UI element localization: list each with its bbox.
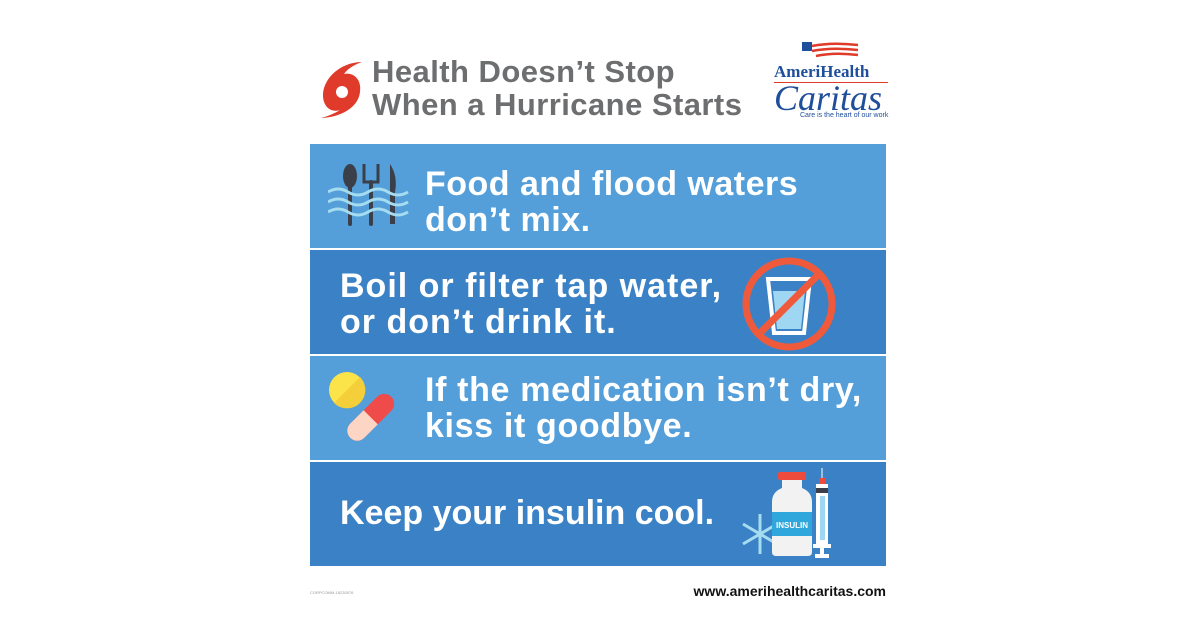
text: don’t mix. [425,201,591,239]
text: Keep your insulin cool. [340,494,714,532]
panel: medication [310,356,886,460]
panel: insulin [310,462,886,566]
text [425,371,862,445]
footer url: www.amerihealthcaritas.com [694,583,886,599]
logo: AmeriHealth Caritas: AmeriHealth [774,62,869,81]
panel: food and flood waters [310,144,886,248]
text: Food and flood waters [425,165,798,203]
text [425,165,798,239]
icon: pills [329,372,394,441]
icon: insulin vial, syringe, snowflake: INSULIN [776,521,808,530]
footer code: CORPCOMM-18230576 [310,590,353,595]
text: Boil or filter tap water, [340,267,722,305]
text: kiss it goodbye. [425,407,692,445]
icon: utensils and waves [328,164,409,226]
logo: AmeriHealth Caritas: Care is the heart of our work [800,112,888,119]
icon: hurricane [320,62,362,118]
text: If the medication isn’t dry, [425,371,862,409]
icon: flag [802,42,858,58]
title: Health Doesn’t Stop [372,54,675,89]
icon: no drinking glass [742,258,836,350]
logo: AmeriHealth Caritas: Caritas [774,78,882,118]
text: or don’t drink it. [340,303,617,341]
text [340,267,722,341]
title: When a Hurricane Starts [372,87,742,122]
panel: boil or filter [310,250,886,354]
icon: insulin vial, syringe, snowflake [742,468,831,558]
title [372,54,742,122]
logo: AmeriHealth Caritas [774,42,888,119]
